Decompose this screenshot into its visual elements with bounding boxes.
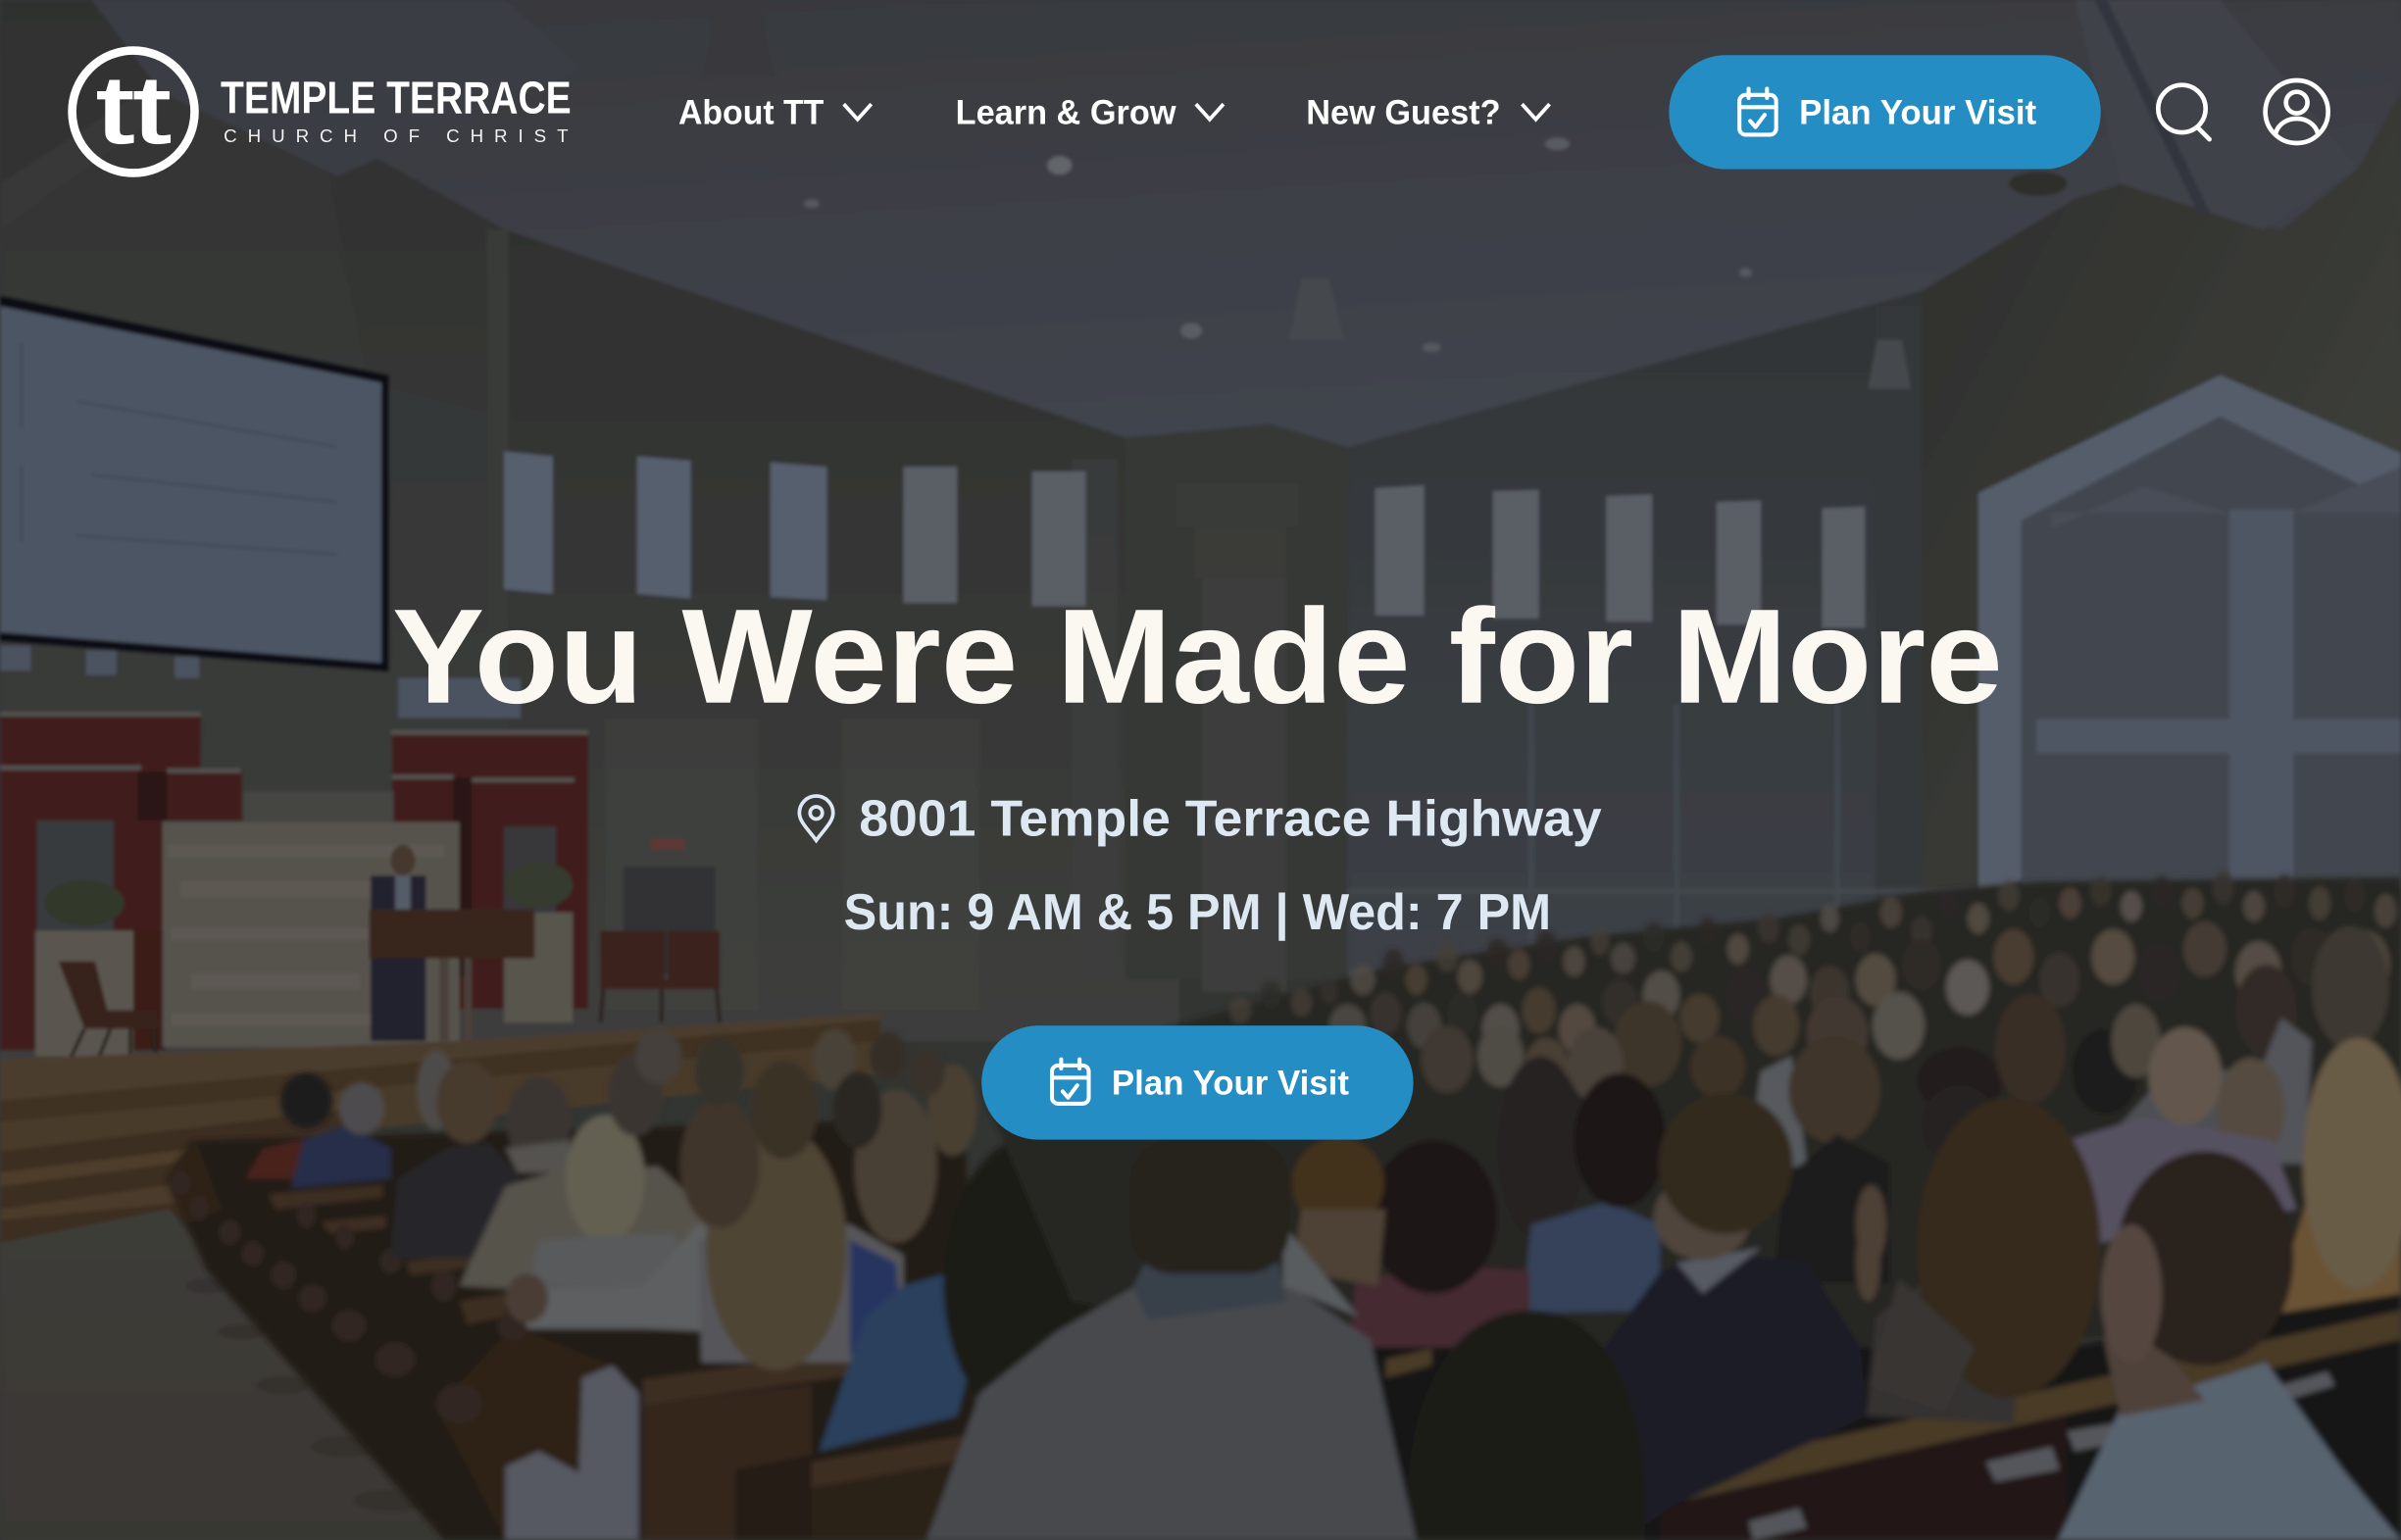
wall panel lines bbox=[1347, 704, 1976, 949]
lectern and speaker bbox=[371, 875, 425, 1041]
navigation bbox=[678, 93, 1550, 131]
back wall left bbox=[506, 229, 1179, 1041]
foreground man on the right bbox=[2058, 1151, 2401, 1540]
mid and rear crowd bbox=[980, 877, 2401, 1377]
nav: New Guest?: New Guest? bbox=[1306, 93, 1501, 131]
nav: Learn & Grow: Learn & Grow bbox=[956, 93, 1176, 131]
white arch bbox=[2022, 417, 2401, 888]
logo wordmark: TEMPLE TERRACE bbox=[221, 73, 572, 124]
icon: user bbox=[2266, 80, 2328, 143]
lights bbox=[701, 0, 2067, 389]
pew shadows on carpet bbox=[185, 1278, 427, 1511]
icon: calendar bbox=[1739, 89, 1776, 134]
pew end caps bbox=[172, 1171, 528, 1423]
headline: You Were Made for More bbox=[392, 582, 2003, 732]
foreground woman bbox=[1856, 1098, 2101, 1423]
icon: calendar bbox=[1052, 1060, 1089, 1104]
far right blond woman bbox=[2266, 1038, 2401, 1332]
stage walls: red and stone bbox=[0, 715, 201, 771]
icon: map pin bbox=[799, 796, 833, 840]
foreground man in grey shirt bbox=[926, 1139, 1417, 1540]
back wall right bbox=[1347, 291, 1922, 979]
service times: Sun: 9 AM & 5 PM | Wed: 7 PM bbox=[844, 883, 1551, 941]
far right wall bbox=[1922, 92, 2401, 979]
left wall bbox=[0, 0, 506, 1071]
icon: search bbox=[2158, 85, 2210, 139]
white pew end bbox=[506, 1366, 638, 1540]
header button: Plan Your Visit bbox=[1799, 93, 2036, 131]
address: 8001 Temple Terrace Highway bbox=[859, 790, 1602, 847]
logo mark: tt bbox=[97, 56, 171, 163]
logo tagline: CHURCH OF CHRIST bbox=[224, 125, 569, 146]
stage door and chairs bbox=[624, 867, 715, 973]
header button bbox=[1669, 55, 2101, 170]
nav: About TT: About TT bbox=[678, 93, 825, 131]
windows bbox=[504, 452, 1865, 627]
nearer rows bbox=[1292, 926, 2388, 1355]
hero button: Plan Your Visit bbox=[1112, 1065, 1349, 1103]
stage floor and steps bbox=[0, 1014, 880, 1101]
hero button bbox=[981, 1025, 1414, 1140]
mid people bbox=[1788, 1036, 1880, 1144]
audience bbox=[166, 871, 2401, 1540]
foreground dark-haired head bbox=[1407, 1311, 1646, 1540]
ceiling bbox=[92, 0, 2401, 447]
carpet bbox=[0, 1210, 460, 1540]
logo mark bbox=[73, 51, 195, 173]
plants bbox=[44, 880, 125, 926]
rear rows bbox=[1229, 871, 2396, 1024]
column bbox=[1176, 483, 1298, 526]
middle rows bbox=[1329, 921, 2390, 1053]
pew backs right bbox=[1225, 1294, 2401, 1540]
screen bbox=[0, 295, 389, 672]
logo bbox=[73, 51, 572, 173]
small windows below screen bbox=[0, 646, 521, 718]
man in navy suit bbox=[1591, 1093, 1867, 1540]
left seated people bbox=[245, 1028, 1127, 1451]
pews left bbox=[166, 1118, 980, 1540]
